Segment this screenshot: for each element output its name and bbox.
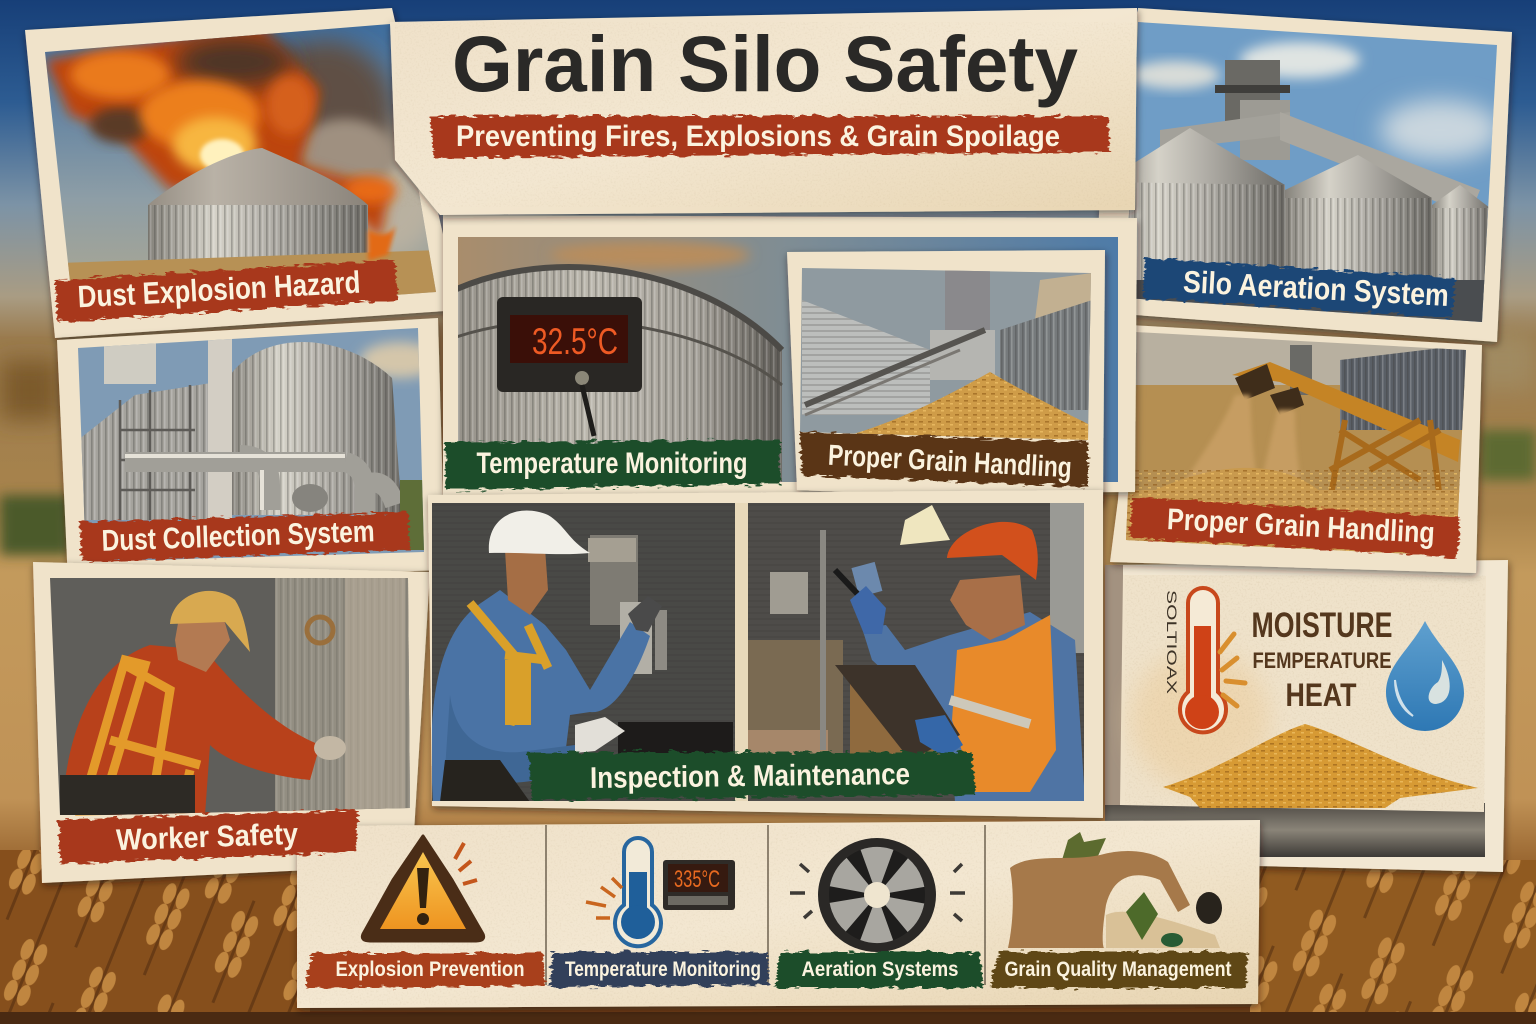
icon: thermometer with display bbox=[586, 838, 735, 946]
photo: grain pile under conveyor bbox=[800, 265, 1095, 440]
icon: thermometer with display: 335°C bbox=[674, 866, 720, 893]
photo: grain auger bbox=[1120, 325, 1480, 560]
icon: digital temperature display bbox=[497, 297, 642, 436]
icon: grain quality sack bbox=[1008, 832, 1222, 948]
panel: worker safety bbox=[33, 562, 430, 883]
banner: silo aeration system: Silo Aeration System bbox=[1182, 264, 1450, 313]
banner: proper grain handling card bbox=[800, 432, 1088, 487]
photo: silo on fire bbox=[45, 24, 436, 316]
panel: dust explosion hazard bbox=[25, 8, 460, 338]
panel: proper grain handling right bbox=[1110, 325, 1482, 573]
panel: proper grain handling card bbox=[787, 250, 1105, 503]
banner: worker safety: Worker Safety bbox=[116, 818, 299, 857]
banner: proper grain handling right bbox=[1130, 497, 1460, 557]
panel: silo aeration system bbox=[1095, 8, 1512, 342]
title: Grain Silo Safety bbox=[452, 19, 1078, 108]
photo: inspector with harness bbox=[431, 503, 735, 802]
icon: thermometer bbox=[1180, 588, 1245, 732]
photo: dust collection pipes bbox=[70, 320, 440, 560]
banner: dust explosion hazard: Dust Explosion Hazard bbox=[77, 265, 361, 314]
panel: inspection and maintenance bbox=[428, 490, 1103, 818]
text: temperature: FEMPERATURE bbox=[1252, 648, 1392, 673]
icon: water drop bbox=[1386, 621, 1464, 731]
banner: proper grain handling right: Proper Grain Handling bbox=[1166, 503, 1436, 550]
banner: silo aeration system bbox=[1143, 258, 1455, 318]
banner: inspection and maintenance bbox=[528, 752, 975, 800]
banner: temperature monitoring: Temperature Monitoring bbox=[476, 447, 748, 480]
icon: warning triangle bbox=[362, 836, 484, 941]
panel: title bbox=[390, 8, 1137, 215]
label: grain quality management bbox=[990, 952, 1248, 988]
banner: worker safety bbox=[58, 810, 358, 864]
label: temperature monitoring bbox=[549, 952, 768, 987]
banner: inspection and maintenance: Inspection & Maintenance bbox=[590, 758, 910, 795]
icon: aeration fan bbox=[790, 838, 965, 952]
banner: proper grain handling card: Proper Grain Handling bbox=[827, 440, 1073, 484]
icon: digital temperature display: 32.5°C bbox=[532, 321, 618, 362]
panel: bottom icon strip bbox=[297, 820, 1260, 1008]
photo: silo with digital display bbox=[435, 237, 1118, 490]
banner: dust collection system: Dust Collection System bbox=[101, 515, 375, 558]
illustration: grain pile bbox=[1163, 724, 1478, 808]
photo: worker with harness bbox=[45, 575, 415, 815]
banner: temperature monitoring bbox=[445, 440, 780, 490]
photo: inspector with clipboard bbox=[748, 503, 1085, 802]
label: rotated sensor text: SOLTIOAX bbox=[1164, 590, 1180, 695]
panel: temperature monitoring bbox=[435, 215, 1137, 495]
panel: dust collection system bbox=[57, 318, 445, 582]
label: aeration systems bbox=[775, 952, 982, 988]
label: explosion prevention: Explosion Prevention bbox=[336, 958, 524, 981]
photo: aeration silos bbox=[1128, 22, 1497, 322]
label: aeration systems: Aeration Systems bbox=[802, 958, 958, 981]
label: temperature monitoring: Temperature Monitoring bbox=[565, 958, 761, 981]
text: heat: HEAT bbox=[1286, 677, 1357, 713]
text: moisture: MOISTURE bbox=[1252, 606, 1392, 645]
subtitle banner: Preventing Fires, Explosions & Grain Spoilage bbox=[456, 120, 1060, 153]
panel: moisture temperature heat bbox=[1105, 560, 1508, 872]
label: grain quality management: Grain Quality Management bbox=[1004, 958, 1232, 981]
label: explosion prevention bbox=[305, 953, 545, 988]
